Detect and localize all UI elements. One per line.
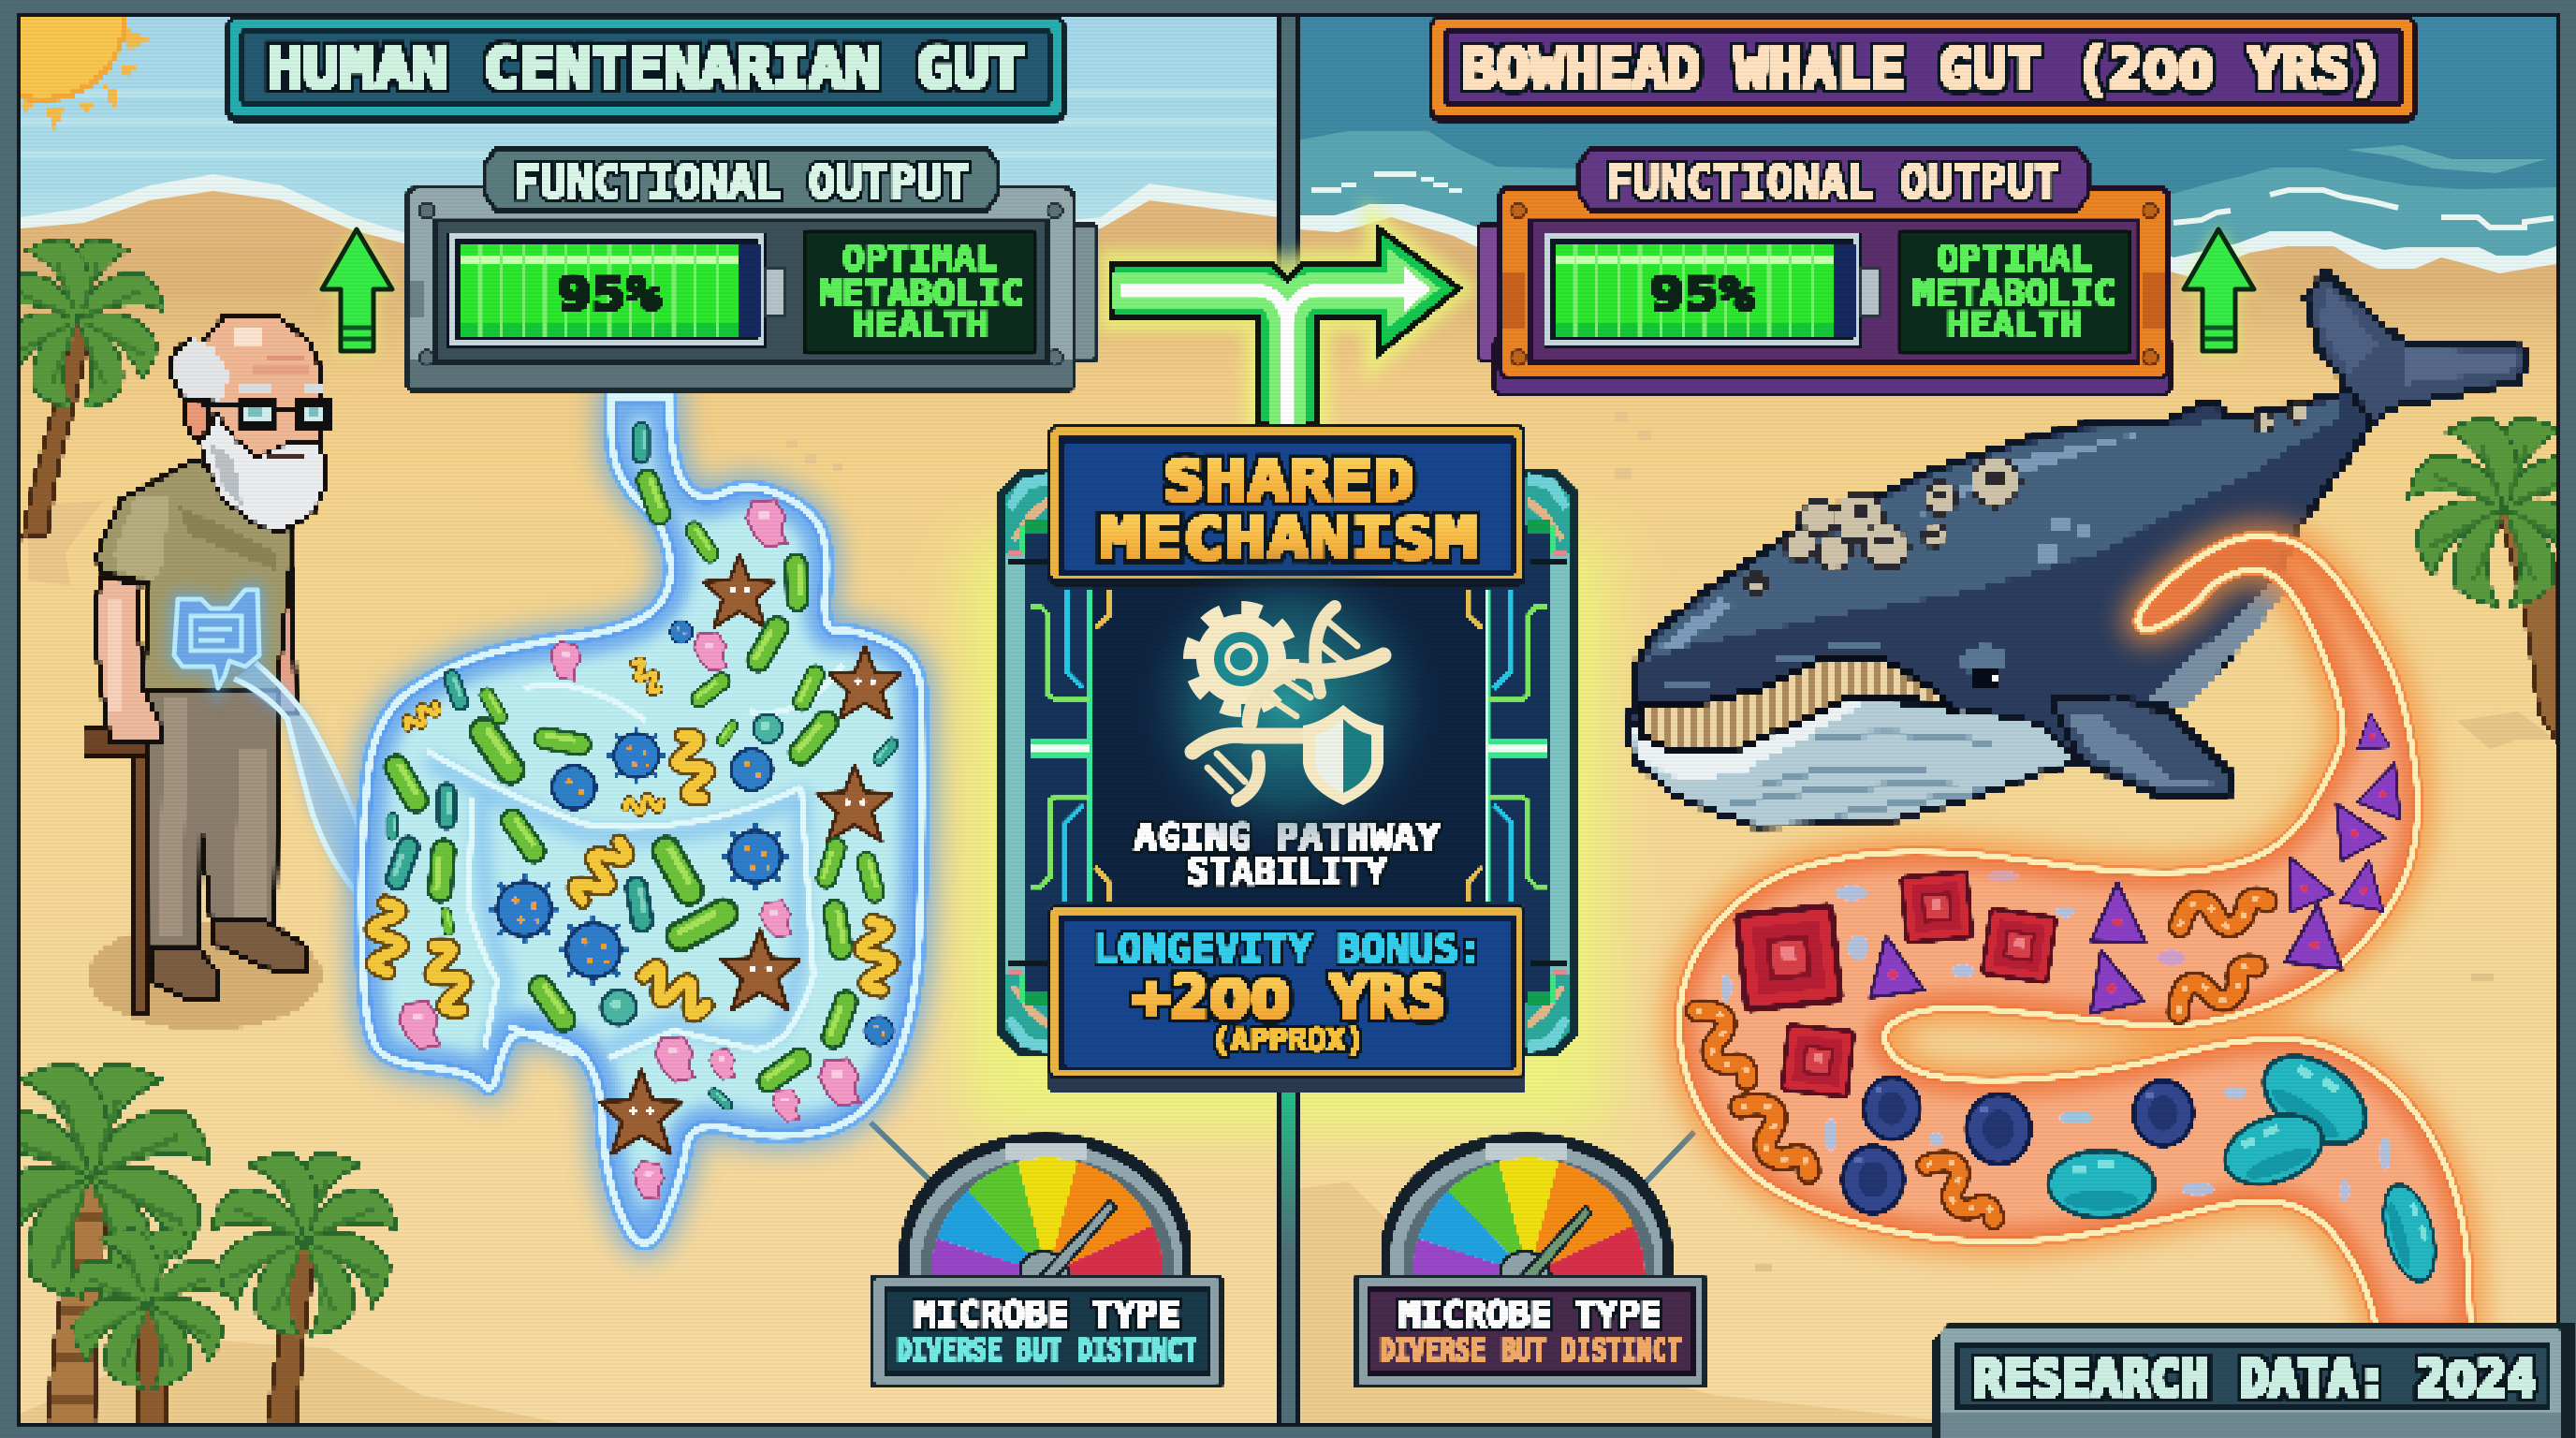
gauge label plate: DIVERSE BUT DISTINCT [897,1332,1197,1368]
chart: human gut microbiome [361,397,922,1243]
barnacles [1746,404,2307,593]
icon: green up arrow right [2180,227,2258,354]
connector: glowing band from figure to gut [234,663,367,903]
gauge label plate: MICROBE TYPE [1398,1294,1661,1335]
illustration: palm trees [0,232,400,1428]
arm and hand [96,577,161,741]
panel: shared mechanism [998,425,1578,1093]
rear lower flank [2150,571,2293,710]
gauge needle [1515,1206,1591,1290]
panel: whale functional output [1479,149,2171,394]
palm: lower left large [21,1063,211,1423]
tail fluke [2306,272,2528,424]
status screen: HEALTH [1946,305,2083,345]
gauge label plate [1354,1275,1707,1388]
illustration: human centenarian figure [84,316,328,1030]
illustration: bowhead whale [1627,272,2528,826]
palm: lower small [65,1222,231,1428]
tab: functional output: FUNCTIONAL OUTPUT [513,156,970,209]
header: shared mechanism: SHARED [1164,448,1414,514]
inner orange wall band [1679,536,2471,1339]
connector: right gut to gauge [1646,1132,1694,1182]
panel: right sea and beach background [1297,17,2556,1423]
frame corner ornaments [1006,473,1570,1053]
title: bowhead whale gut: BOWHEAD WHALE GUT (200 YRS) [1462,37,2384,102]
caption: aging pathway stability [1134,816,1441,894]
whale upper back tone [1645,401,2340,661]
battery gauge 95% [447,234,784,348]
sea: wispy upper wave [2347,145,2546,173]
status screen: METABOLIC [1912,273,2115,314]
white side hair and ear [169,337,229,401]
gear [1191,609,1292,710]
inner blue band of the gut wall [361,397,922,1243]
callout: longevity bonus: +200 YRS [1132,963,1446,1032]
gauge: whale microbe type [1354,1133,1707,1388]
ground shadow [88,921,322,1030]
whale eye [1961,645,2006,688]
panel: left beach background [0,0,1279,1425]
header: shared mechanism: MECHANISM [1099,506,1477,572]
gauge: human microbe type [870,1133,1223,1388]
far arm [271,571,296,712]
gauge label plate: MICROBE TYPE [914,1294,1180,1335]
callout: longevity bonus [1048,904,1526,1093]
icon: gear, DNA helix and shield [1129,544,1447,862]
divider: central column [1277,0,1300,1438]
glow: center energy halo [964,534,1610,1133]
status screen [805,231,1035,353]
shield [1303,705,1383,805]
battery gauge 95%: 95% [557,267,661,321]
caption: aging pathway stability: AGING PATHWAY [1134,816,1441,858]
whale lower jaw and belly [1627,697,2080,826]
gauge label plate: DIVERSE BUT DISTINCT [1380,1332,1682,1368]
badge: research data 2024 [1933,1323,2576,1438]
back frame [998,469,1578,1057]
icon: glowing gut on figure [174,590,259,688]
whale baleen [1639,658,1959,752]
small residue flecks [1720,871,2391,1202]
status screen: OPTIMAL [1937,239,2093,279]
status screen: HEALTH [853,305,988,345]
caption: aging pathway stability: STABILITY [1187,851,1387,894]
chart: whale gut microbiome [1679,536,2471,1339]
badge: research data 2024: RESEARCH DATA: 2024 [1973,1349,2536,1408]
connector: left gut to gauge [871,1123,932,1182]
shore foam and sand [1300,204,2556,277]
gauge needle [1033,1200,1116,1290]
title: human centenarian gut [226,16,1066,123]
head [192,316,321,459]
shirt [96,459,290,689]
glasses [240,403,328,426]
trousers [148,683,279,946]
callout: longevity bonus: (APPROX) [1211,1021,1365,1058]
fold lines inside the gut [427,665,842,1058]
header: shared mechanism [1048,425,1526,586]
pectoral fin [2051,695,2231,798]
title: human centenarian gut: HUMAN CENTENARIAN GUT [267,36,1025,101]
cane [133,749,149,1013]
status screen: METABOLIC [819,273,1023,314]
beard [199,412,325,532]
icon: sun [21,17,150,131]
palm: lower middle [209,1145,400,1428]
status screen: OPTIMAL [842,239,998,279]
gauge label plate [870,1275,1223,1388]
circuit traces left and right [1031,591,1546,901]
microbes in human gut [372,422,900,1202]
panel: human functional output [404,149,1096,394]
sea: lighter wave band [1300,131,2556,257]
eyebrows [237,382,321,392]
sea: whitecaps [1311,171,1462,193]
tab: functional output: FUNCTIONAL OUTPUT [1606,156,2060,209]
connector: pipe below centre panel [1281,1086,1295,1255]
palm: upper left [21,239,164,543]
title: bowhead whale gut [1429,16,2417,123]
microbes in whale gut [1696,712,2444,1286]
callout: longevity bonus: LONGEVITY BONUS: [1093,926,1483,972]
whale body [1627,389,2372,826]
battery gauge 95% [1544,234,1880,348]
palm: right side [2406,417,2556,744]
shoes [153,947,218,1000]
status screen [1899,231,2130,353]
battery gauge 95%: 95% [1649,267,1754,321]
arrow: green T pipe from human panel to whale panel [1111,225,1460,424]
whale back highlights [1659,433,2144,652]
icon: green up arrow left [318,227,396,354]
DNA [1193,607,1383,800]
